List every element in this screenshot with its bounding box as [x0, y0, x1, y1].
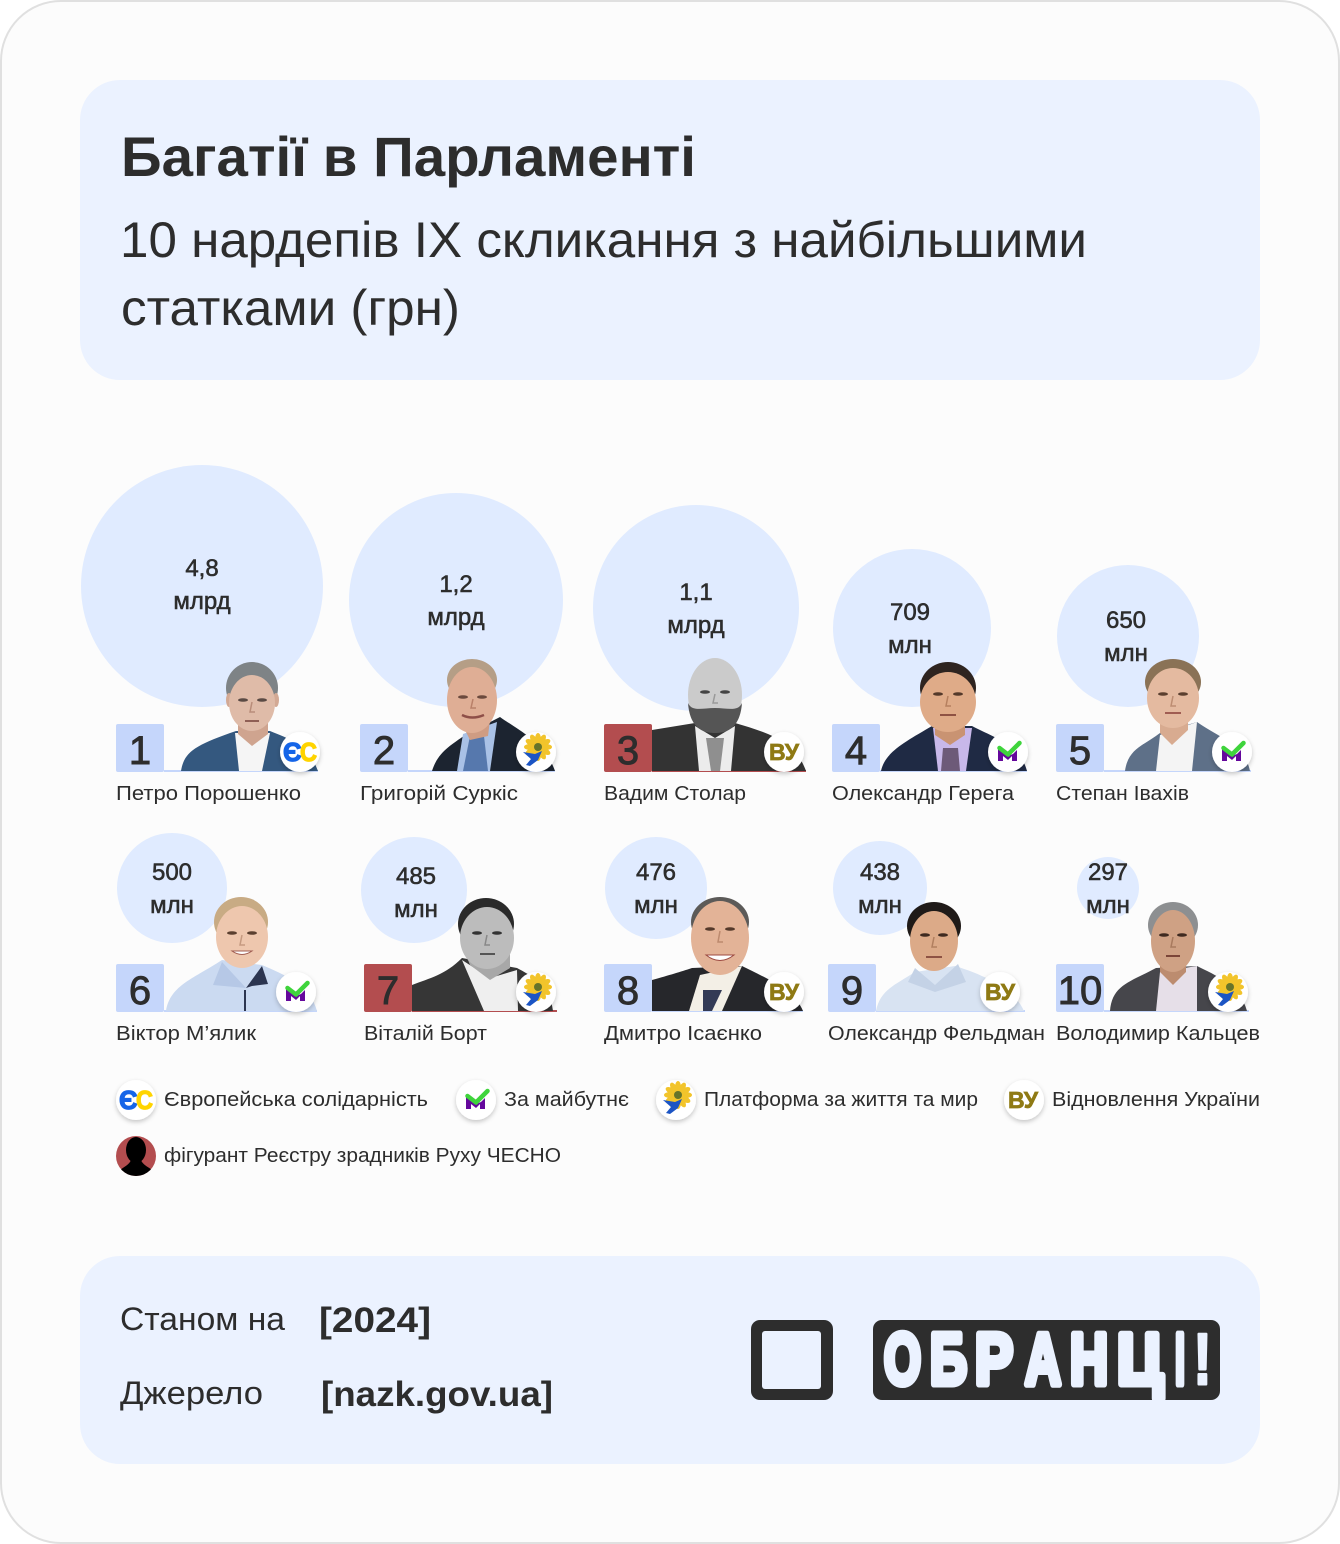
legend item: Європейська солідарність: Європейська солідарність — [164, 1089, 428, 1111]
legend item: Європейська солідарність: Є — [119, 1085, 138, 1115]
bubble: deputy 3 wealth: млрд — [667, 612, 725, 639]
deputy 5: Івахів — [1056, 659, 1252, 805]
bubble: deputy 10 wealth — [1077, 857, 1139, 919]
portrait — [432, 659, 555, 771]
bubble: deputy 8 wealth: 476 — [636, 859, 676, 886]
bubble: deputy 8 wealth: млн — [634, 892, 678, 919]
name: Олександр Герега — [832, 783, 1015, 805]
name: Олександр Фельдман — [828, 1023, 1045, 1045]
legend item: Відновлення України: ВУ — [1008, 1087, 1039, 1113]
rank number: 6 — [129, 969, 151, 1013]
rank number: 3 — [617, 729, 639, 773]
name: Петро Порошенко — [116, 783, 301, 805]
deputy 2: Суркіс — [360, 659, 556, 805]
title: Багатії в Парламенті — [121, 125, 696, 188]
bubble: deputy 5 wealth: 650 — [1106, 607, 1146, 634]
bubble: deputy 6 wealth: млн — [150, 892, 194, 919]
name: Віктор М’ялик — [116, 1023, 256, 1045]
bubble: deputy 1 wealth: млрд — [173, 588, 231, 615]
bubble: deputy 4 wealth: млн — [888, 632, 932, 659]
logo: wordmark: Р — [975, 1320, 1013, 1400]
bubble: deputy 3 wealth: 1,1 — [679, 579, 713, 606]
party badge — [764, 732, 804, 772]
logo: wordmark: О — [884, 1320, 921, 1400]
deputy 6: М'ялик — [116, 897, 317, 1045]
bubble: deputy 9 wealth — [833, 841, 927, 935]
deputy 9: Фельдман — [828, 902, 1045, 1045]
bubble: deputy 4 wealth: 709 — [890, 599, 930, 626]
rank number — [1056, 724, 1104, 773]
source — [120, 1375, 553, 1414]
date: Станом на — [120, 1301, 285, 1337]
logo: wordmark: ! — [1194, 1320, 1212, 1400]
deputy 3: Столар — [604, 658, 806, 805]
rank number — [604, 724, 652, 773]
panel: footer — [80, 1256, 1260, 1464]
rank number — [116, 964, 164, 1013]
logo: wordmark: А — [1025, 1320, 1061, 1400]
legend item: За майбутнє: За майбутнє — [504, 1089, 629, 1111]
rank number — [828, 964, 876, 1013]
portrait — [1125, 659, 1250, 771]
rank number — [604, 964, 652, 1013]
bubble: deputy 5 wealth — [1057, 565, 1199, 707]
bubble: deputy 9 wealth: 438 — [860, 859, 900, 886]
party badge: ВУ — [985, 979, 1016, 1005]
legend item: Європейська солідарність — [116, 1080, 428, 1120]
deputy 10: Кальцев — [1056, 902, 1260, 1045]
legend item: За майбутнє — [456, 1080, 629, 1120]
party badge: С — [300, 737, 317, 767]
party badge — [1212, 732, 1252, 772]
bubble: deputy 2 wealth: млрд — [427, 604, 485, 631]
logo: wordmark: Н — [1070, 1320, 1108, 1400]
bubble: deputy 10 wealth: 297 — [1088, 859, 1128, 886]
party badge — [516, 972, 556, 1012]
subtitle — [120, 212, 1087, 336]
rank number: 7 — [377, 969, 399, 1013]
logo: wordmark: І — [1175, 1320, 1185, 1400]
bubble: deputy 7 wealth: млн — [394, 896, 438, 923]
bubble: deputy 8 wealth — [605, 837, 707, 939]
logo: wordmark: Б — [930, 1320, 967, 1400]
bubble: deputy 7 wealth — [361, 837, 467, 943]
bubble: deputy 10 wealth: млн — [1086, 892, 1130, 919]
party badge — [764, 972, 804, 1012]
portrait — [881, 662, 1027, 771]
deputy 4: Герега — [832, 662, 1028, 805]
bubble: deputy 3 wealth — [593, 505, 799, 711]
portrait — [652, 658, 806, 771]
legend item: Платформа за життя та мир — [656, 1080, 978, 1120]
bubble: deputy 7 wealth: 485 — [396, 863, 436, 890]
name: Вадим Столар — [604, 783, 746, 805]
bubble: deputy 6 wealth: 500 — [152, 859, 192, 886]
legend item: traitor registry: фігурант Реєстру зрадників Руху ЧЕСНО — [164, 1145, 561, 1167]
party badge — [980, 972, 1020, 1012]
legend item: Відновлення України: Відновлення України — [1052, 1089, 1260, 1111]
bubble: deputy 2 wealth: 1,2 — [439, 571, 473, 598]
deputy 7: Борт — [364, 898, 557, 1045]
rank number: 5 — [1069, 729, 1091, 773]
bubble: deputy 6 wealth — [117, 833, 227, 943]
logo: checkbox — [751, 1320, 833, 1400]
rank number: 4 — [845, 729, 867, 773]
date: [2024] — [319, 1301, 431, 1340]
name: Григорій Суркіс — [360, 783, 518, 805]
party badge — [516, 732, 556, 772]
bubble: deputy 9 wealth: млн — [858, 892, 902, 919]
deputy 8: Ісаєнко — [604, 897, 804, 1045]
portrait — [652, 897, 803, 1011]
party badge — [988, 732, 1028, 772]
source: [nazk.gov.ua] — [321, 1375, 553, 1414]
portrait — [1110, 902, 1247, 1011]
subtitle: 10 нардепів IX скликання з найбільшими — [120, 212, 1087, 268]
panel: header — [80, 80, 1260, 380]
name: Дмитро Ісаєнко — [604, 1023, 762, 1045]
legend item: Європейська солідарність: С — [136, 1085, 153, 1115]
source: Джерело — [120, 1375, 263, 1411]
bubble: deputy 5 wealth: млн — [1104, 640, 1148, 667]
portrait — [166, 897, 317, 1011]
rank number — [364, 964, 412, 1013]
logo: wordmark: Ц — [1117, 1320, 1163, 1400]
rank number — [832, 724, 880, 773]
name: Степан Івахів — [1056, 783, 1189, 805]
legend — [116, 1080, 1260, 1178]
rank number — [116, 724, 164, 773]
subtitle: статками (грн) — [121, 280, 460, 336]
bubble: deputy 4 wealth — [833, 549, 991, 707]
date — [120, 1301, 431, 1340]
party badge: ВУ — [769, 979, 800, 1005]
portrait — [876, 902, 1024, 1011]
bubble: deputy 1 wealth: 4,8 — [185, 555, 219, 582]
rank number — [360, 724, 408, 773]
party badge: Є — [283, 737, 302, 767]
rank number: 2 — [373, 729, 395, 773]
bubble: deputy 1 wealth — [81, 465, 323, 707]
name: Віталій Борт — [364, 1023, 487, 1045]
rank number: 8 — [617, 969, 639, 1013]
party badge — [280, 732, 320, 772]
party badge — [1208, 972, 1248, 1012]
party badge: ВУ — [769, 739, 800, 765]
bubble: deputy 2 wealth — [349, 493, 563, 707]
rank number: 10 — [1058, 969, 1102, 1013]
legend item: Відновлення України — [1004, 1080, 1260, 1120]
party badge — [276, 972, 316, 1012]
name: Володимир Кальцев — [1056, 1023, 1260, 1045]
deputy 1: Порошенко — [116, 662, 320, 805]
legend item: traitor registry — [116, 1136, 561, 1178]
rank number: 9 — [841, 969, 863, 1013]
logo: wordmark — [873, 1320, 1220, 1400]
portrait — [181, 662, 318, 771]
legend item: Платформа за життя та мир: Платформа за життя та мир — [704, 1089, 978, 1111]
portrait — [412, 898, 553, 1011]
rank number: 1 — [129, 729, 151, 773]
